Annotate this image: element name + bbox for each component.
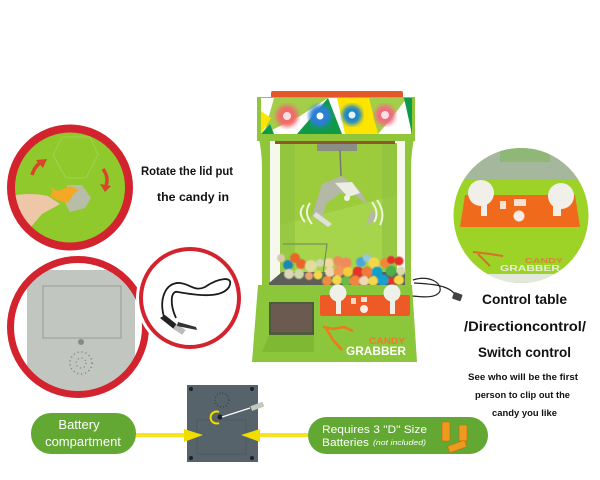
orange panel bbox=[460, 195, 580, 227]
logo: candy grabber bbox=[323, 327, 406, 358]
orange roof bar bbox=[271, 91, 403, 98]
hand bbox=[16, 194, 60, 226]
label: batteries required: Batteries bbox=[322, 437, 370, 449]
text: control description: candy you like bbox=[492, 408, 557, 419]
cable plugs bbox=[160, 315, 180, 330]
usb plug bbox=[452, 292, 463, 301]
label: battery compartment bbox=[31, 413, 136, 454]
joysticks bbox=[330, 284, 400, 314]
grey panel bbox=[27, 270, 135, 400]
icon: batteries bbox=[442, 422, 467, 453]
circle: rotate lid bbox=[10, 128, 130, 248]
speaker bbox=[215, 393, 229, 407]
candy bbox=[50, 186, 79, 203]
motion arcs bbox=[301, 200, 382, 225]
cable coil bbox=[162, 279, 230, 320]
marquee roof bbox=[257, 91, 415, 141]
logo: candy grabber: CANDY bbox=[369, 336, 405, 346]
orange control panel bbox=[320, 295, 410, 316]
label: batteries required: Requires 3 "D" Size bbox=[322, 424, 427, 436]
circle: control table detail: GRABBER bbox=[500, 263, 560, 273]
text: control description: /Directioncontrol/ bbox=[464, 318, 586, 334]
claw mount bbox=[317, 141, 357, 151]
text: control description: Switch control bbox=[478, 344, 571, 360]
screw bbox=[78, 339, 84, 345]
arrow: left to device bbox=[136, 429, 203, 442]
claw chain bbox=[340, 150, 341, 176]
text: rotate lid bbox=[141, 164, 233, 204]
circle: usb cable bbox=[136, 244, 244, 352]
arrow: right to device bbox=[241, 429, 308, 442]
box edge bbox=[283, 244, 327, 281]
product: claw machine bbox=[252, 91, 463, 362]
text: control description: Control table bbox=[482, 291, 567, 307]
lid hole bbox=[65, 185, 91, 212]
rotate icon bbox=[211, 412, 219, 424]
text: control description bbox=[464, 291, 586, 419]
machine cable bbox=[412, 278, 456, 297]
gumballs bbox=[277, 253, 406, 286]
joysticks bbox=[481, 200, 487, 216]
logo: candy grabber: GRABBER bbox=[346, 344, 406, 358]
upper window bbox=[464, 148, 578, 180]
device back panel bbox=[187, 385, 264, 462]
circle: control table detail bbox=[452, 148, 590, 286]
bin floor bbox=[269, 272, 405, 285]
red ring bbox=[11, 128, 129, 246]
text: rotate lid: the candy in bbox=[157, 190, 229, 204]
red ring bbox=[10, 260, 146, 394]
text: rotate lid: Rotate the lid put bbox=[141, 164, 233, 178]
rotate arrows bbox=[32, 161, 43, 175]
label: batteries required: (not included) bbox=[373, 440, 426, 447]
label: battery compartment: Battery bbox=[58, 417, 100, 432]
speaker holes bbox=[70, 352, 92, 374]
screwdriver bbox=[222, 408, 250, 417]
claw bbox=[312, 176, 378, 227]
dispenser door bbox=[269, 302, 314, 335]
base cabinet bbox=[252, 285, 417, 362]
text: control description: See who will be the first bbox=[468, 372, 579, 383]
text: control description: person to clip out the bbox=[475, 390, 570, 401]
marquee lights bbox=[276, 105, 298, 127]
detail logo: CANDY bbox=[525, 258, 564, 265]
battery hatch outline bbox=[43, 286, 121, 338]
label: batteries required bbox=[308, 417, 488, 454]
frame posts bbox=[258, 97, 270, 290]
white side windows bbox=[270, 140, 280, 288]
hexagon lid bbox=[53, 137, 98, 178]
marquee panel bbox=[257, 97, 415, 141]
back panel bbox=[280, 143, 397, 288]
hatch outline bbox=[197, 420, 246, 454]
label: battery compartment: compartment bbox=[45, 434, 121, 449]
corner screws bbox=[189, 387, 193, 391]
circle: speaker panel bbox=[10, 260, 146, 400]
